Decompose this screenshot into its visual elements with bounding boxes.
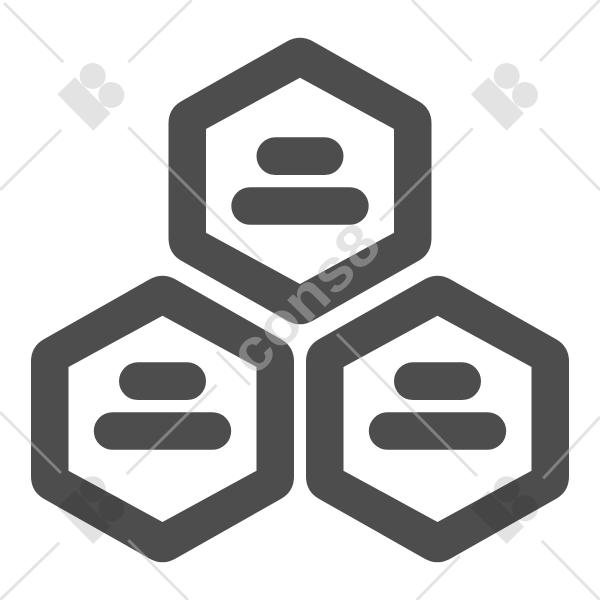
watermark logo: top left [57, 63, 124, 131]
watermark logo: bottom left [57, 476, 124, 544]
hexagon: top [168, 38, 432, 324]
watermark: Icons8 wordmark: cons8 [216, 210, 393, 387]
hexagon: bottom left [31, 276, 294, 562]
icon: three hexagons [31, 38, 569, 562]
watermark logo: bottom right [471, 476, 538, 544]
watermark logo: top right [471, 63, 538, 131]
hexagon: bottom right [306, 276, 569, 562]
